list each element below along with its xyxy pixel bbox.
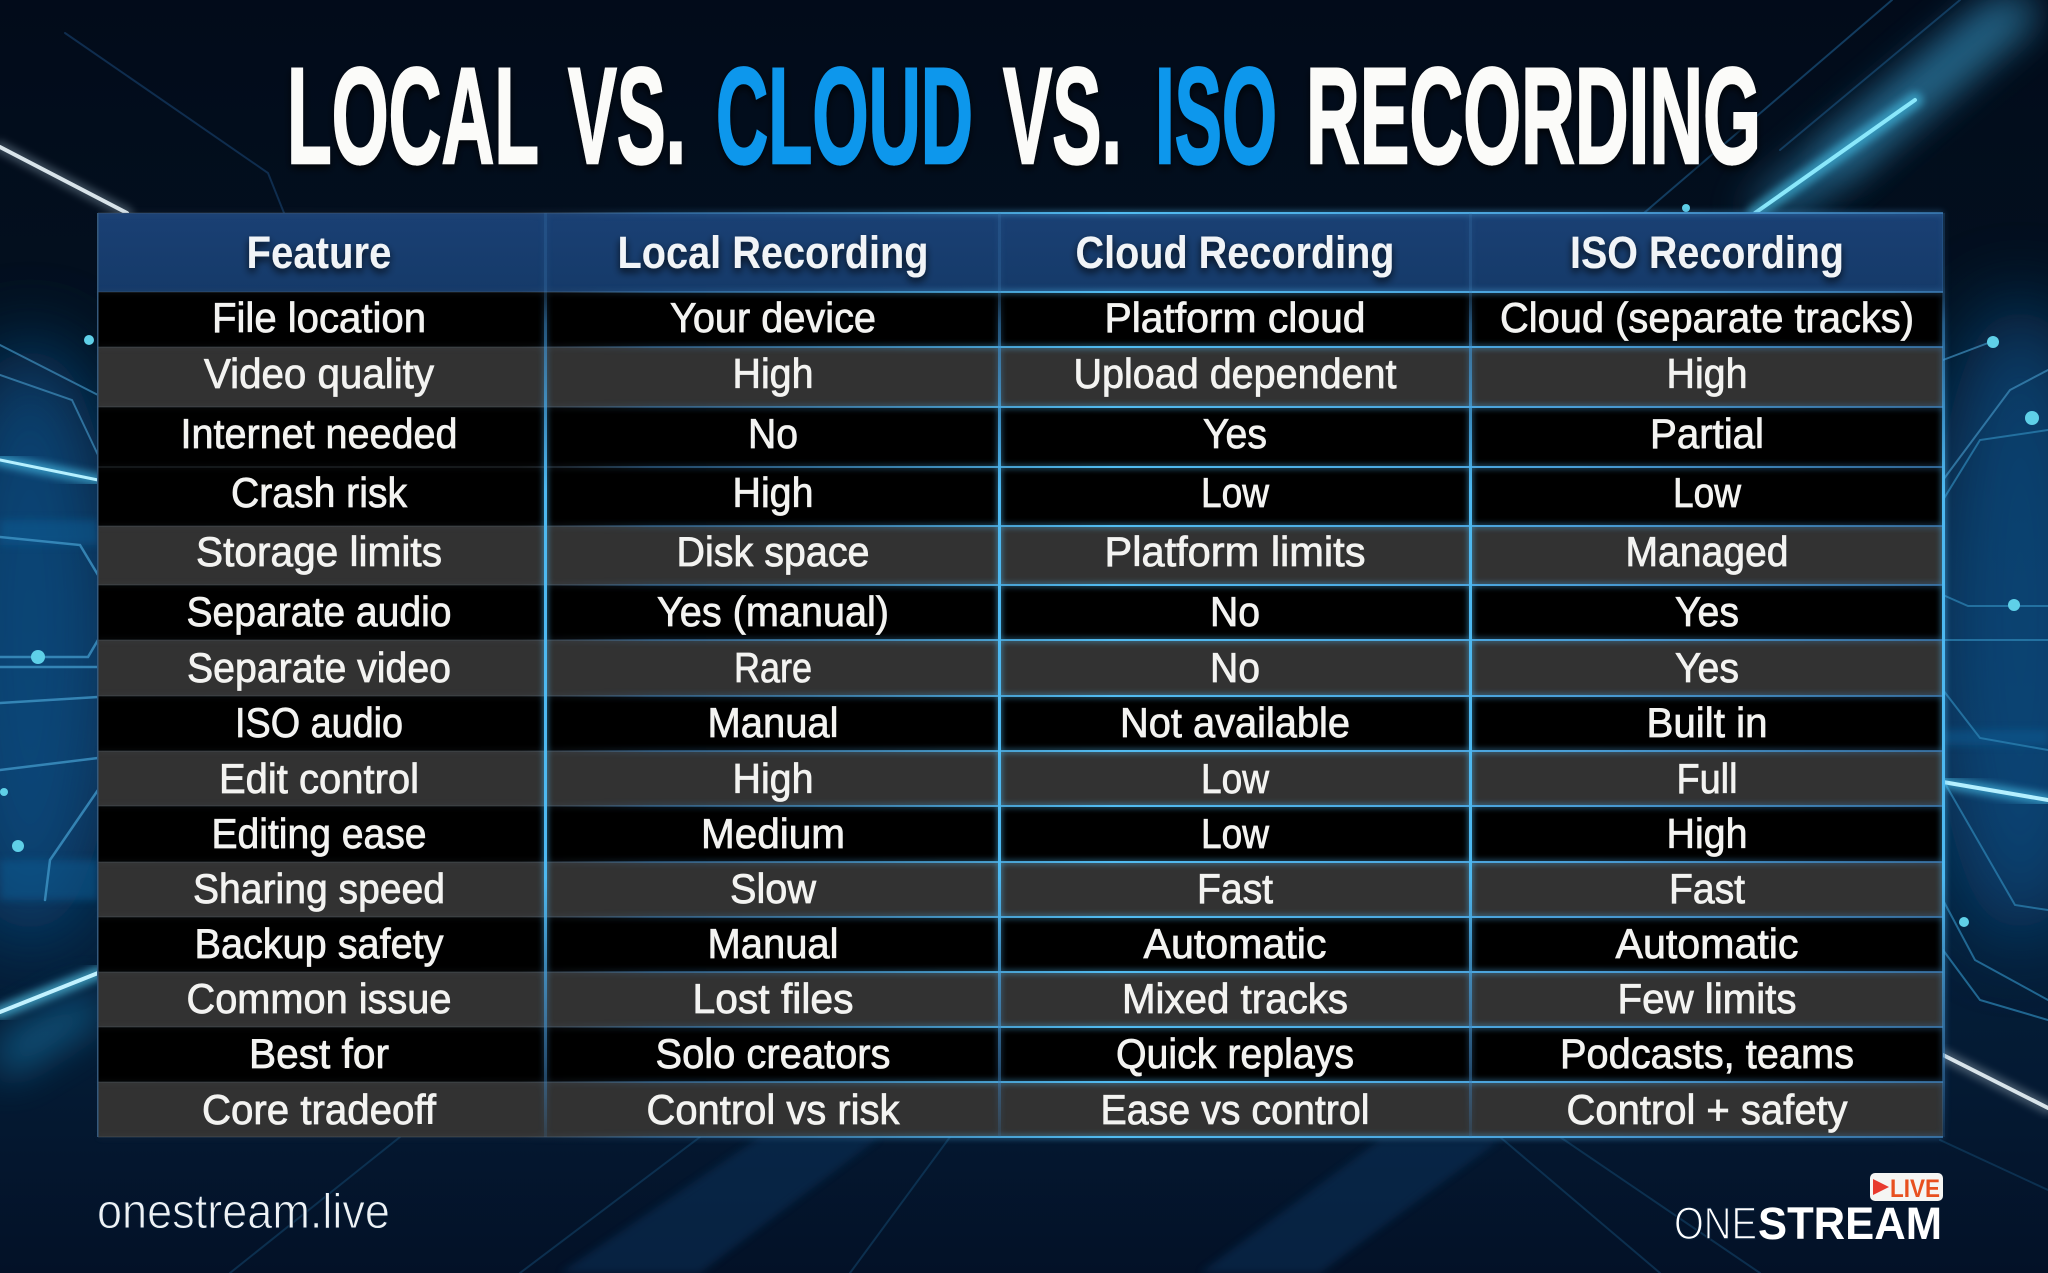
row: common issue: Mixed tracks (1122, 975, 1348, 1022)
row: crash risk: Crash risk (231, 469, 408, 516)
row: best for: Quick replays (1116, 1030, 1354, 1077)
row: file location: File location (212, 294, 426, 341)
row: edit control: Low (1201, 755, 1270, 802)
row: sharing speed (193, 865, 1745, 912)
title: VS. (1003, 40, 1122, 193)
row: common issue: Common issue (186, 975, 452, 1022)
row: sharing speed: Slow (730, 865, 817, 912)
logo: onestream live (1674, 1173, 1943, 1249)
row: internet needed: Internet needed (180, 410, 458, 457)
row: backup safety: Automatic (1616, 920, 1798, 967)
row: storage limits (196, 528, 1788, 575)
row: storage limits: Storage limits (196, 528, 442, 575)
row: separate video: No (1210, 644, 1260, 691)
row: video quality: Upload dependent (1074, 350, 1397, 397)
row: common issue: Few limits (1618, 975, 1796, 1022)
table header text: ISO Recording (1570, 227, 1844, 278)
wordmark: ONE (1674, 1198, 1757, 1249)
wordmark (1674, 1198, 1942, 1249)
title (287, 40, 1761, 193)
row: best for: Podcasts, teams (1560, 1030, 1854, 1077)
row: iso audio: ISO audio (235, 699, 403, 746)
row: video quality: Video quality (204, 350, 434, 397)
row: separate audio: Yes (1675, 588, 1739, 635)
row: internet needed: Partial (1650, 410, 1764, 457)
row: backup safety (194, 920, 1798, 967)
live badge (1870, 1173, 1943, 1203)
table header text: Local Recording (618, 227, 928, 278)
row: separate video: Separate video (187, 644, 451, 691)
live badge: LIVE (1890, 1175, 1940, 1203)
glowing grid lines (97, 213, 1946, 1137)
row: editing ease: Medium (701, 810, 845, 857)
title: VS. (568, 40, 686, 193)
row: core tradeoff (202, 1086, 1848, 1133)
row: edit control (219, 755, 1738, 802)
row: iso audio: Not available (1120, 699, 1350, 746)
row: iso audio: Manual (708, 699, 838, 746)
row: editing ease: Editing ease (212, 810, 426, 857)
row: edit control: Full (1676, 755, 1738, 802)
row: crash risk: Low (1201, 469, 1270, 516)
title: LOCAL (287, 40, 539, 193)
title: CLOUD (716, 40, 973, 193)
row: storage limits: Disk space (676, 528, 870, 575)
row: internet needed: No (748, 410, 798, 457)
row: file location: Platform cloud (1104, 294, 1366, 341)
row: edit control: Edit control (219, 755, 419, 802)
comparison table (97, 213, 1946, 1137)
row: separate video (187, 644, 1739, 691)
row: common issue: Lost files (692, 975, 854, 1022)
table header text: Feature (246, 227, 392, 278)
row: sharing speed: Sharing speed (193, 865, 445, 912)
row: sharing speed: Fast (1669, 865, 1745, 912)
row: editing ease: Low (1201, 810, 1270, 857)
row: core tradeoff: Control vs risk (646, 1086, 900, 1133)
row: file location (212, 294, 1914, 341)
row: separate audio: Yes (manual) (657, 588, 889, 635)
row: storage limits: Managed (1626, 528, 1788, 575)
wordmark: STREAM (1758, 1198, 1942, 1249)
row: separate audio: No (1210, 588, 1260, 635)
table row backgrounds (98, 292, 1943, 1137)
table header text (246, 227, 1844, 278)
row: video quality (204, 350, 1748, 397)
row: editing ease: High (1666, 810, 1748, 857)
row: backup safety: Manual (708, 920, 838, 967)
website url: onestream.live (97, 1185, 390, 1239)
row: iso audio: Built in (1646, 699, 1768, 746)
row: file location: Your device (670, 294, 876, 341)
row: separate video: Rare (734, 644, 812, 691)
row: separate video: Yes (1675, 644, 1739, 691)
row: iso audio (235, 699, 1768, 746)
row: sharing speed: Fast (1197, 865, 1273, 912)
row: core tradeoff: Control + safety (1566, 1086, 1848, 1133)
row: separate audio (186, 588, 1739, 635)
row: best for: Best for (249, 1030, 389, 1077)
table header band (98, 213, 1943, 292)
row: best for (249, 1030, 1854, 1077)
row: crash risk (231, 469, 1742, 516)
row: storage limits: Platform limits (1104, 528, 1366, 575)
row: edit control: High (732, 755, 814, 802)
row: common issue (186, 975, 1796, 1022)
table header text: Cloud Recording (1076, 227, 1394, 278)
row: file location: Cloud (separate tracks) (1500, 294, 1914, 341)
row: internet needed: Yes (1203, 410, 1267, 457)
row: internet needed (180, 410, 1764, 457)
row: separate audio: Separate audio (186, 588, 452, 635)
row: video quality: High (1666, 350, 1748, 397)
row: core tradeoff: Ease vs control (1100, 1086, 1370, 1133)
row: video quality: High (732, 350, 814, 397)
row: editing ease (212, 810, 1748, 857)
row: crash risk: Low (1673, 469, 1742, 516)
row: crash risk: High (732, 469, 814, 516)
row: backup safety: Backup safety (194, 920, 444, 967)
title: ISO (1155, 40, 1277, 193)
row: core tradeoff: Core tradeoff (202, 1086, 436, 1133)
row: best for: Solo creators (656, 1030, 890, 1077)
row: backup safety: Automatic (1144, 920, 1326, 967)
